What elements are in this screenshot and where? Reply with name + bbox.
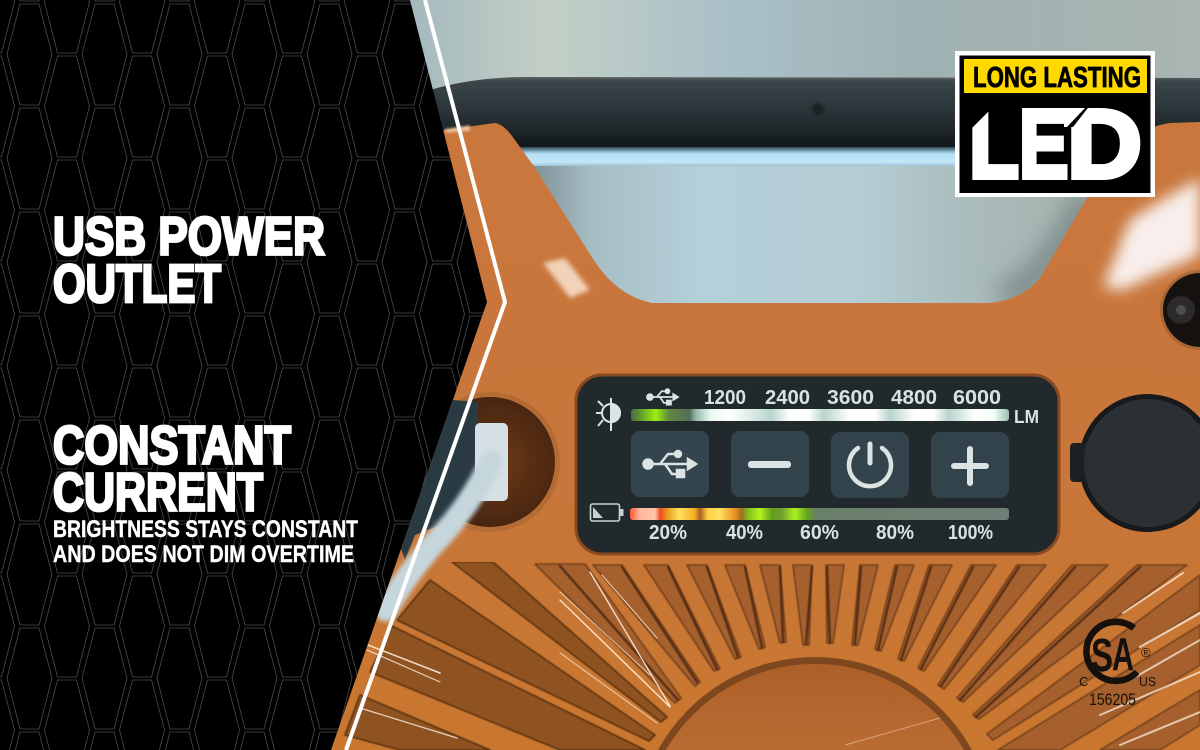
badge: long lasting LED: D — [1067, 90, 1142, 198]
dome groove and dome — [658, 657, 972, 750]
battery percent scale: 40% — [726, 522, 763, 544]
white chevron divider line — [346, 0, 505, 750]
USB button — [631, 431, 709, 497]
certification mark: CSA: 156205 — [1089, 690, 1136, 709]
lumen scale: 4800 — [891, 387, 937, 409]
text block: brightness note — [53, 516, 358, 568]
certification mark: CSA: S — [1091, 629, 1113, 681]
certification mark: CSA: C — [1079, 674, 1088, 689]
handle mark — [812, 103, 824, 115]
panel: black hexagon background — [0, 0, 520, 750]
battery level bar — [630, 508, 1009, 520]
USB port recess — [398, 392, 560, 560]
badge: long lasting LED: E — [1019, 90, 1068, 198]
power button — [831, 432, 909, 498]
battery percent scale — [650, 525, 993, 539]
vent slots — [345, 562, 1200, 750]
brightness icon — [596, 398, 620, 431]
heading: constant current — [53, 416, 291, 522]
text block: brightness note: AND DOES NOT DIM OVERTIME — [53, 541, 354, 568]
heading: constant current: CURRENT — [53, 462, 263, 522]
badge: long lasting LED: LONG LASTING — [973, 62, 1141, 94]
camera hole — [1160, 270, 1200, 350]
certification mark: CSA: A — [1112, 628, 1134, 680]
certification mark: CSA — [1079, 622, 1156, 709]
heading: USB power outlet: USB POWER — [53, 206, 325, 266]
window behind frame — [534, 166, 1088, 303]
specular glare right — [1103, 178, 1200, 290]
battery percent scale: 100% — [948, 522, 993, 544]
badge: long lasting LED: L — [969, 90, 1019, 198]
photo: product close-up — [320, 0, 1200, 750]
battery icon — [590, 504, 624, 521]
battery percent scale: 80% — [876, 522, 914, 544]
orange housing — [320, 122, 1200, 750]
battery percent scale: 20% — [649, 522, 687, 544]
certification mark: CSA: US — [1139, 674, 1156, 689]
heading: USB power outlet — [53, 206, 325, 314]
small USB icon — [647, 389, 678, 405]
lumen light bar — [631, 409, 1009, 421]
badge: long lasting LED — [955, 51, 1155, 198]
handle — [430, 77, 1200, 150]
rib highlights — [360, 572, 1200, 745]
background blurred sky — [400, 0, 1200, 90]
window shadow — [1000, 195, 1090, 298]
lumen scale: 6000 — [953, 387, 1001, 409]
rubber port cap — [1070, 394, 1200, 532]
heading: USB power outlet: OUTLET — [53, 254, 221, 314]
plus button — [931, 432, 1009, 498]
text block: brightness note: BRIGHTNESS STAYS CONSTANT — [53, 516, 358, 543]
certification mark: CSA: ® — [1141, 645, 1151, 660]
lumen scale: LM — [1014, 407, 1039, 427]
white USB plug — [475, 423, 508, 501]
lumen scale — [705, 390, 1038, 423]
lumen scale: 1200 — [704, 387, 746, 409]
battery percent scale: 60% — [800, 522, 839, 544]
specular glare left — [543, 258, 590, 298]
white cable — [386, 462, 491, 610]
lumen scale: 2400 — [765, 387, 810, 409]
control panel — [576, 375, 1059, 554]
heading: constant current: CONSTANT — [53, 416, 291, 476]
minus button — [731, 431, 809, 497]
lumen scale: 3600 — [827, 387, 874, 409]
top left shine — [444, 125, 470, 133]
light strip under handle — [520, 147, 955, 166]
